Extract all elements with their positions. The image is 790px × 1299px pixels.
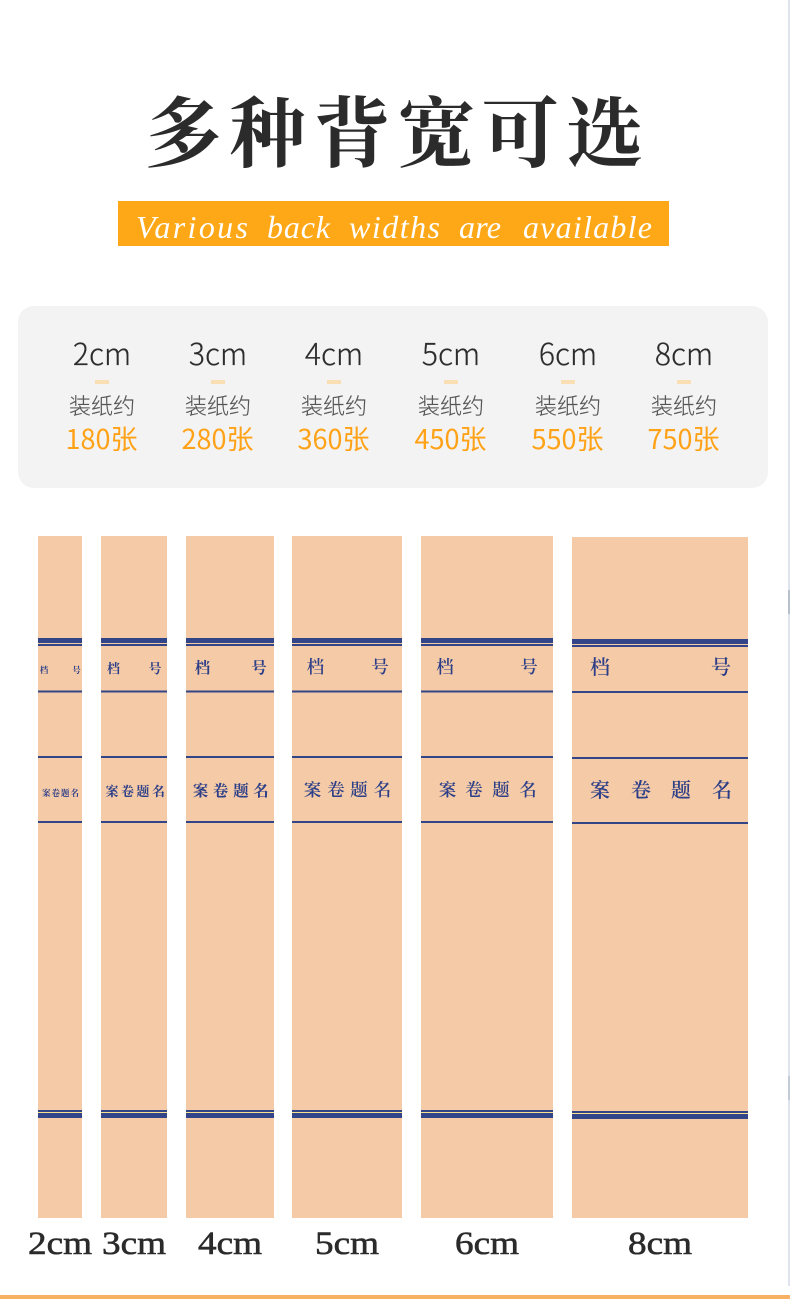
spine width labels: 3cm: [102, 1226, 166, 1262]
column: 5cm capacity: 450张: [415, 418, 486, 457]
spine: 2cm: [38, 536, 82, 1218]
column: 2cm capacity: 2cm: [73, 330, 131, 374]
subtitle banner: are: [459, 209, 501, 245]
subtitle banner: available: [523, 209, 652, 245]
spine: 5cm: 题: [350, 777, 368, 802]
spine: 2cm: 号: [72, 664, 81, 676]
spine: 6cm: 号: [520, 654, 538, 679]
spine width labels: 5cm: [315, 1226, 379, 1262]
column: 4cm capacity: 4cm: [305, 330, 363, 374]
spine: 3cm: 名: [152, 781, 165, 800]
spine width labels: 2cm: [28, 1226, 92, 1262]
spine: 8cm: 卷: [631, 774, 651, 803]
spine: 3cm: 档: [107, 658, 120, 677]
spine: 8cm: 案: [590, 774, 610, 803]
spine: 3cm: [101, 536, 167, 1218]
spine: 6cm: [421, 536, 553, 1218]
spine: 4cm: 题: [233, 779, 249, 801]
spine width labels: 4cm: [198, 1226, 262, 1262]
spine: 3cm: 号: [148, 658, 162, 677]
bottom orange rule: [0, 1295, 790, 1299]
spine: 4cm: 档: [195, 656, 211, 678]
column: 8cm capacity: 750张: [648, 418, 719, 457]
spine: 4cm: [186, 536, 274, 1218]
column: 5cm capacity: [415, 330, 486, 457]
spine: 8cm: 档: [590, 651, 610, 680]
column: 2cm capacity: [66, 330, 137, 457]
column: 6cm capacity: [532, 330, 603, 457]
column: 3cm capacity: [182, 330, 253, 457]
panel: capacity table: [18, 306, 768, 488]
subtitle banner: Various: [136, 209, 248, 245]
spine: 8cm: 名: [712, 774, 732, 803]
column: 5cm capacity: 5cm: [422, 330, 480, 374]
spine: 4cm: 卷: [213, 779, 229, 801]
column: 6cm capacity: 550张: [532, 418, 603, 457]
spine: 8cm: 号: [711, 651, 731, 680]
spine: 3cm: 案: [105, 781, 119, 800]
spine: 6cm: 名: [519, 777, 537, 802]
column: 3cm capacity: 280张: [182, 418, 253, 457]
spine: 3cm: 题: [136, 781, 150, 800]
subtitle banner: back: [267, 209, 331, 245]
spine: 5cm: 名: [374, 777, 391, 802]
spine: 5cm: 号: [371, 654, 389, 679]
spine: 3cm: 卷: [121, 781, 134, 800]
subtitle banner: widths: [349, 209, 440, 245]
column: 2cm capacity: 装纸约: [69, 389, 135, 421]
spine: 6cm: 案: [439, 777, 457, 802]
column: 2cm capacity: 180张: [66, 418, 137, 457]
spine: 4cm: 名: [253, 779, 269, 801]
spine: 5cm: 档: [307, 654, 324, 679]
subtitle banner: [118, 201, 669, 246]
spine: 8cm: [572, 537, 748, 1218]
spine: 4cm: 案: [193, 779, 209, 801]
spine width labels: 8cm: [628, 1226, 692, 1262]
column: 4cm capacity: 360张: [298, 418, 369, 457]
spine width labels: 6cm: [455, 1226, 519, 1262]
spine: 2cm: 案卷题名: [42, 787, 80, 799]
column: 4cm capacity: 装纸约: [301, 389, 367, 421]
column: 8cm capacity: [648, 330, 719, 457]
spine: 5cm: [292, 536, 402, 1218]
spine width labels: [28, 1226, 692, 1262]
spine: 6cm: 档: [436, 654, 454, 679]
column: 3cm capacity: 装纸约: [185, 389, 251, 421]
column: 6cm capacity: 6cm: [539, 330, 597, 374]
title: 多种背宽可选: [145, 73, 643, 184]
column: 3cm capacity: 3cm: [189, 330, 247, 374]
column: 5cm capacity: 装纸约: [418, 389, 484, 421]
spine: 5cm: 卷: [327, 777, 345, 802]
column: 8cm capacity: 8cm: [655, 330, 713, 374]
spine: 6cm: 卷: [465, 777, 483, 802]
spine: 2cm: 档: [40, 664, 49, 676]
spine: 8cm: 题: [671, 774, 691, 803]
column: 4cm capacity: [298, 330, 369, 457]
spine: 5cm: 案: [304, 777, 322, 802]
spine: 6cm: 题: [492, 777, 510, 802]
spine: 4cm: 号: [251, 656, 267, 678]
column: 6cm capacity: 装纸约: [535, 389, 601, 421]
column: 8cm capacity: 装纸约: [651, 389, 717, 421]
